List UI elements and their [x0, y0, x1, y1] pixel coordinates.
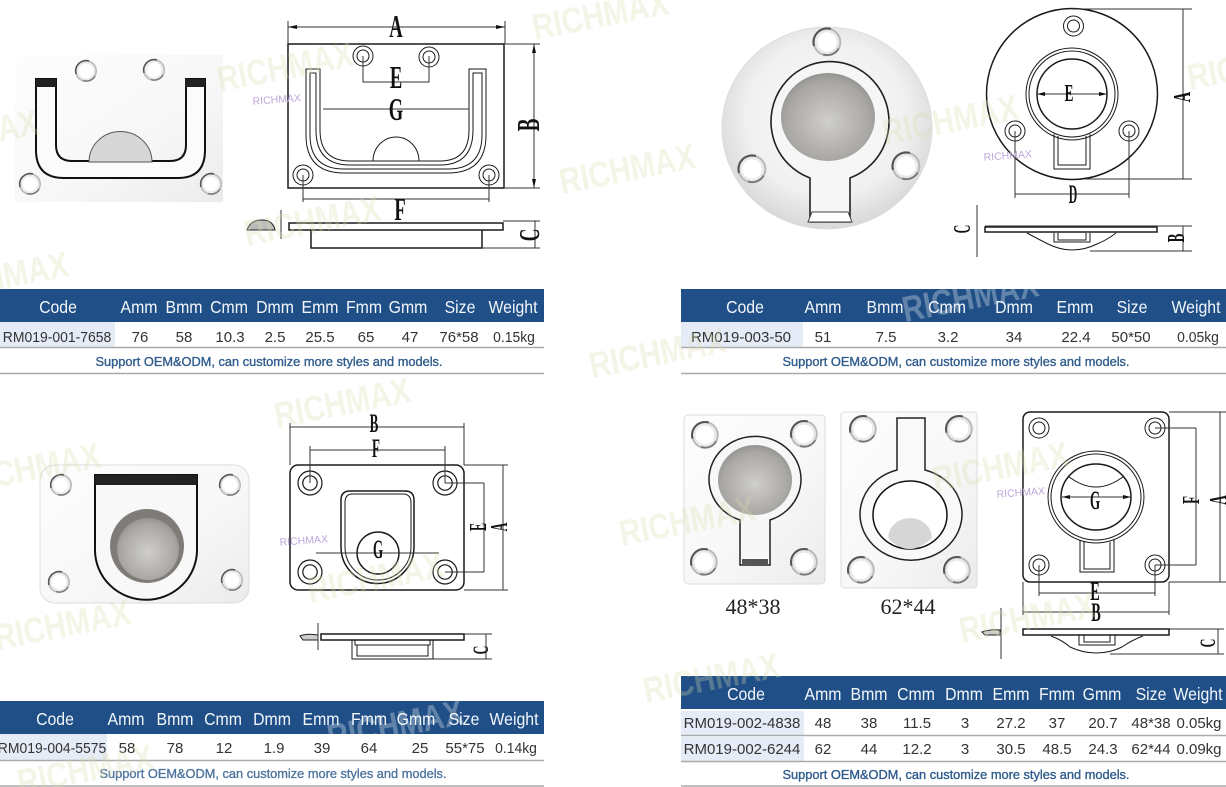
specification table RM019-004: Gmm — [397, 709, 435, 729]
product photo: recessed rectangular handle — [40, 465, 249, 603]
specification table RM019-003: Size — [1117, 297, 1147, 317]
technical drawing: top view with dimensions A D E — [986, 8, 1196, 209]
specification table RM019-001: Cmm — [210, 297, 248, 317]
specification table RM019-003: Bmm — [867, 297, 903, 317]
specification table RM019-001: Emm — [302, 297, 338, 317]
specification table RM019-003: Dmm — [995, 297, 1033, 317]
brand watermarks: RICHMAX — [324, 692, 467, 758]
dimension letter F: F — [372, 435, 380, 463]
specification table RM019-002: 48 — [815, 715, 831, 732]
dimension letter E: E — [1090, 576, 1100, 606]
specification table RM019-002: 12.2 — [902, 741, 932, 758]
note: OEM support: Support OEM&ODM, can customize more styles and models. — [96, 354, 442, 369]
dimension letter E: E — [390, 60, 402, 95]
specification table RM019-002: 48*38 — [1131, 715, 1171, 732]
specification table RM019-002: RM019-002-4838 — [684, 715, 800, 732]
specification table RM019-004: 78 — [167, 740, 183, 757]
specification table RM019-003: 22.4 — [1061, 329, 1091, 346]
panel: bottom-right rectangular ring handles RM019-002 — [681, 412, 1226, 786]
specification table RM019-003: Code — [726, 297, 764, 317]
dimension letter F: F — [1179, 496, 1205, 504]
specification table RM019-003: 0.05kg — [1177, 330, 1219, 346]
brand watermarks: RICHMAX — [304, 545, 447, 611]
specification table RM019-002: Amm — [805, 684, 841, 704]
small purple watermark labels: RICHMAX — [996, 485, 1045, 501]
brand watermarks: RICHMAX — [956, 585, 1099, 651]
size caption 48*38: 48*38 — [726, 594, 780, 619]
brand watermarks: RICHMAX — [899, 264, 1042, 330]
dimension letter F: F — [394, 192, 406, 227]
technical drawing: top view with dimensions A B E F G — [290, 410, 513, 590]
dimension letter C: C — [950, 225, 976, 233]
technical drawing: top view with dimensions A B E F G — [1023, 412, 1226, 627]
specification table RM019-002: Fmm — [1039, 684, 1075, 704]
technical drawing: top view with dimensions A B E F G — [288, 9, 546, 227]
dimension letter B: B — [1091, 597, 1101, 627]
panel: top-right round ring handle RM019-003 — [681, 8, 1226, 374]
size caption 62*44: 62*44 — [880, 594, 936, 619]
brand watermarks: RICHMAX — [929, 434, 1072, 500]
specification table RM019-002: 30.5 — [996, 741, 1026, 758]
specification table RM019-004: 64 — [361, 740, 377, 757]
specification table RM019-003: 50*50 — [1111, 329, 1151, 346]
note: OEM support: Support OEM&ODM, can customize more styles and models. — [783, 354, 1129, 369]
specification table RM019-001: Dmm — [256, 297, 294, 317]
dimension letter C: C — [468, 646, 493, 654]
specification table RM019-004: Size — [449, 709, 479, 729]
specification table RM019-004: Fmm — [351, 709, 387, 729]
specification table RM019-002: 0.09kg — [1176, 741, 1222, 758]
specification table RM019-002: 62*44 — [1131, 741, 1171, 758]
technical drawing: side view — [950, 205, 1192, 257]
specification table RM019-003: Weight — [1172, 297, 1221, 317]
dimension letter G: G — [373, 536, 383, 564]
dimension letter A: A — [487, 522, 513, 531]
specification table RM019-003: 3.2 — [938, 329, 958, 346]
product photo: rectangular lift handle — [15, 55, 223, 202]
specification table RM019-001: 76 — [132, 329, 148, 346]
specification table RM019-004: 58 — [119, 740, 135, 757]
small purple watermark labels — [252, 92, 1045, 549]
brand watermarks: RICHMAX — [586, 320, 729, 386]
dimension letter B: B — [510, 119, 546, 131]
brand watermarks: RICHMAX — [271, 370, 414, 436]
specification table RM019-004: Weight — [490, 709, 539, 729]
specification table RM019-002: Bmm — [851, 684, 887, 704]
specification table RM019-003 — [681, 289, 1226, 374]
specification table RM019-001: RM019-001-7658 — [3, 330, 111, 346]
specification table RM019-004: 39 — [314, 740, 330, 757]
specification table RM019-002: 24.3 — [1088, 741, 1118, 758]
specification table RM019-002: Emm — [993, 684, 1029, 704]
specification table RM019-003: 51 — [815, 329, 831, 346]
dimension letter C: C — [515, 229, 546, 241]
specification table RM019-002: RM019-002-6244 — [684, 741, 800, 758]
specification table RM019-002: Gmm — [1083, 684, 1121, 704]
panel: bottom-left recessed handle RM019-004 — [0, 410, 544, 786]
specification table RM019-002 — [681, 676, 1226, 786]
specification table RM019-001: 76*58 — [439, 329, 479, 346]
specification table RM019-001: Amm — [121, 297, 157, 317]
specification table RM019-001: 0.15kg — [493, 330, 535, 346]
specification table RM019-002: 0.05kg — [1176, 715, 1222, 732]
specification table RM019-002: Cmm — [897, 684, 935, 704]
specification table RM019-004: Emm — [303, 709, 339, 729]
specification table RM019-002: 62 — [815, 741, 831, 758]
specification table RM019-001: Gmm — [389, 297, 427, 317]
specification table RM019-001: 47 — [402, 329, 418, 346]
specification table RM019-003: 7.5 — [876, 329, 896, 346]
technical drawing: side view — [982, 608, 1224, 659]
dimension letter D: D — [1069, 181, 1077, 209]
product photo: 62*44 ring handle — [841, 412, 977, 588]
panel: top-left folding handle RM019-001 — [0, 9, 546, 373]
small purple watermark labels: RICHMAX — [983, 148, 1032, 164]
note: OEM support: Support OEM&ODM, can customize more styles and models. — [783, 767, 1129, 782]
specification table RM019-001 — [0, 289, 544, 374]
specification table RM019-003: 34 — [1006, 329, 1022, 346]
specification table RM019-001: 58 — [176, 329, 192, 346]
note: OEM support: Support OEM&ODM, can customize more styles and models. — [100, 766, 446, 781]
specification table RM019-001: Code — [39, 297, 77, 317]
specification table RM019-001: Size — [445, 297, 475, 317]
specification table RM019-002: 37 — [1049, 715, 1065, 732]
specification table RM019-002: 38 — [861, 715, 877, 732]
specification table RM019-004: 1.9 — [264, 740, 284, 757]
specification table RM019-002: Code — [727, 684, 765, 704]
specification table RM019-004 — [0, 701, 544, 786]
dimension letter E: E — [466, 523, 492, 531]
brand watermarks: RICHMAX — [879, 87, 1022, 153]
specification table RM019-002: 11.5 — [903, 715, 931, 732]
specification table RM019-004: 12 — [216, 740, 232, 757]
brand watermarks: RICHMAX — [556, 136, 699, 202]
dimension letter G: G — [389, 92, 403, 127]
technical drawing: side view — [247, 210, 546, 248]
specification table RM019-002: 48.5 — [1042, 741, 1072, 758]
specification table RM019-002: 3 — [961, 715, 969, 732]
small purple watermark labels: RICHMAX — [279, 533, 328, 549]
specification table RM019-002: 44 — [861, 741, 877, 758]
specification table RM019-001: Bmm — [166, 297, 202, 317]
specification table RM019-002: Weight — [1174, 684, 1223, 704]
dimension letter B: B — [370, 410, 379, 438]
specification table RM019-004: Bmm — [157, 709, 193, 729]
specification table RM019-004: 55*75 — [445, 740, 485, 757]
specification table RM019-001: 65 — [358, 329, 374, 346]
brand watermarks: RICHMAX — [214, 34, 357, 100]
specification table RM019-001: 2.5 — [265, 329, 285, 346]
dimension letter E: E — [1065, 81, 1073, 107]
specification table RM019-004: Dmm — [253, 709, 291, 729]
dimension letter A: A — [389, 9, 403, 44]
specification table RM019-001: Fmm — [346, 297, 382, 317]
product photo: 48*38 ring handle — [684, 415, 825, 584]
product photo: round lift ring — [722, 27, 932, 229]
specification table RM019-002: Size — [1136, 684, 1166, 704]
specification table RM019-003: RM019-003-50 — [691, 329, 791, 346]
technical drawing: side view — [300, 623, 493, 659]
specification table RM019-001: 25.5 — [305, 329, 335, 346]
brand watermarks: RICHMAX — [616, 488, 759, 554]
specification table RM019-003: Amm — [805, 297, 841, 317]
brand watermarks: RICHMAX — [640, 645, 783, 711]
specification table RM019-001: Weight — [489, 297, 538, 317]
specification table RM019-002: 20.7 — [1088, 715, 1118, 732]
specification table RM019-004: 25 — [412, 740, 428, 757]
dimension letter C: C — [1195, 639, 1220, 647]
specification table RM019-003: Cmm — [928, 297, 966, 317]
specification table RM019-003: Emm — [1057, 297, 1093, 317]
small purple watermark labels: RICHMAX — [252, 92, 301, 108]
specification table RM019-004: RM019-004-5575 — [0, 741, 106, 757]
brand watermarks: RICHMAX — [241, 188, 384, 254]
specification table RM019-002: 27.2 — [996, 715, 1026, 732]
dimension letter A: A — [1169, 91, 1196, 102]
specification table RM019-004: Code — [36, 709, 74, 729]
specification table RM019-002: Dmm — [945, 684, 983, 704]
specification table RM019-002: 3 — [961, 741, 969, 758]
specification table RM019-004: Cmm — [204, 709, 242, 729]
specification table RM019-001: 10.3 — [215, 329, 245, 346]
specification table RM019-004: 0.14kg — [495, 741, 537, 757]
dimension letter G: G — [1090, 487, 1100, 515]
dimension letter B: B — [1164, 234, 1190, 242]
specification table RM019-004: Amm — [108, 709, 144, 729]
